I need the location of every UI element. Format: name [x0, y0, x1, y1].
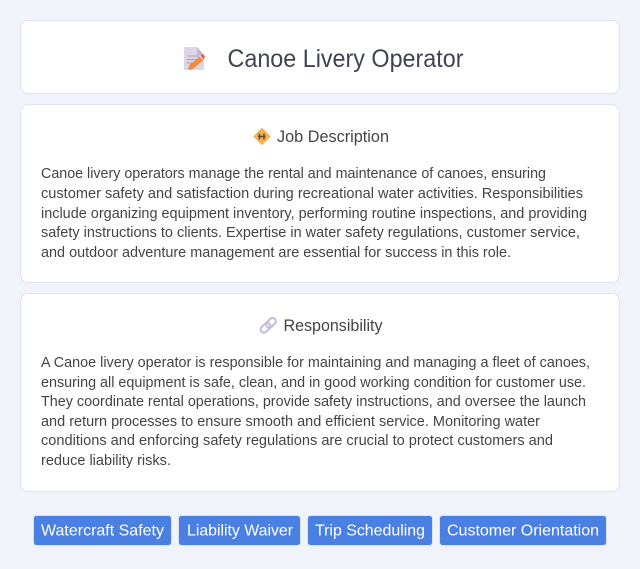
title: Canoe Livery Operator [228, 45, 464, 73]
icon: chain link [259, 317, 277, 334]
text block: responsibility: conditions and enforcing safety regulations are crucial to protect customers and [41, 433, 553, 449]
tag: Trip Scheduling [308, 516, 432, 546]
tag: Liability Waiver [178, 516, 300, 546]
text block: job description: Canoe livery operators manage the rental and maintenance of canoes, ensuring [41, 166, 546, 182]
text block: responsibility: reduce liability risks. [41, 453, 171, 469]
text block: job description [41, 166, 587, 261]
text block: responsibility: and return processes to ensure smooth and efficient service. Monitoring water [41, 414, 540, 430]
panel: job description [20, 104, 620, 282]
text block: responsibility: A Canoe livery operator is responsible for maintaining and managing a fleet of canoes, [41, 355, 590, 371]
text block: job description: safety instructions to clients. Expertise in water safety regulations, customer service, [41, 225, 580, 241]
heading: responsibility: Responsibility [284, 316, 383, 335]
tag: Watercraft Safety [34, 516, 172, 546]
header panel [20, 20, 620, 94]
tag: Customer Orientation [440, 516, 606, 546]
tag: Watercraft Safety: Watercraft Safety [41, 522, 164, 540]
tag: Trip Scheduling: Trip Scheduling [315, 522, 425, 540]
text block: responsibility: ensuring all equipment is safe, clean, and in good working condition for customer use. [41, 375, 586, 391]
text block: job description: customer safety and satisfaction during recreational water activities. Responsibilities [41, 186, 583, 202]
text block: job description: and outdoor adventure management are essential for success in this role. [41, 245, 511, 261]
text block: responsibility [41, 355, 590, 469]
heading: job description: Job Description [277, 127, 389, 146]
icon: diamond road sign [254, 128, 270, 144]
icon: document with pencil [184, 47, 205, 70]
tag: Customer Orientation: Customer Orientation [447, 522, 599, 540]
panel: responsibility [20, 294, 620, 492]
text block: responsibility: They coordinate rental operations, provide safety instructions, and oversee the launch [41, 394, 586, 410]
tag: Liability Waiver: Liability Waiver [187, 522, 293, 540]
text block: job description: include organizing equipment inventory, performing routine inspections, and providing [41, 206, 587, 222]
